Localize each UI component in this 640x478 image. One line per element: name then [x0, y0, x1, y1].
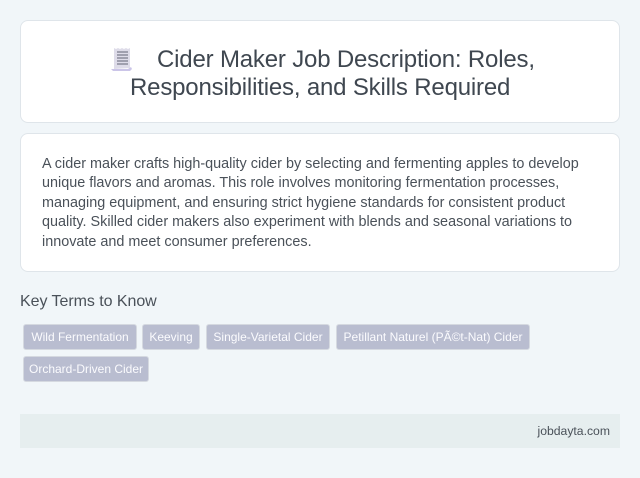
tag: wild fermentation: Wild Fermentation — [31, 330, 129, 344]
text: footer source: jobdayta.com — [538, 424, 610, 438]
tag: keeving — [142, 324, 200, 350]
tag: petillant naturel: Petillant Naturel (PÃ©t-Nat) Cider — [344, 330, 522, 344]
panel: description card — [20, 133, 620, 272]
footer bar — [20, 414, 620, 448]
heading: key terms: Key Terms to Know — [20, 293, 157, 310]
text: description line 1: A cider maker crafts high-quality cider by selecting and fermenting apples to develop — [42, 156, 579, 172]
heading: title line 1: Cider Maker Job Description: Roles, — [157, 46, 535, 73]
panel: title card — [20, 20, 620, 123]
text: description line 3: managing equipment, and ensuring strict hygiene standards for consistent product — [42, 195, 565, 211]
text: description line 2: unique flavors and aromas. This role involves monitoring fermentation processes, — [42, 175, 559, 191]
text: description line 5: innovate and meet consumer preferences. — [42, 234, 312, 250]
tag: single-varietal cider — [206, 324, 330, 350]
tag: keeving: Keeving — [149, 330, 193, 344]
tag: orchard-driven cider — [23, 356, 149, 382]
tag: orchard-driven cider: Orchard-Driven Cider — [29, 362, 143, 376]
tag: petillant naturel — [336, 324, 530, 350]
text: description line 4: quality. Skilled cider makers also experiment with blends and seasonal variations to — [42, 214, 572, 230]
heading: title line 2: Responsibilities, and Skills Required — [130, 74, 510, 101]
icon: document scroll — [111, 48, 132, 71]
tag: wild fermentation — [23, 324, 137, 350]
tag: single-varietal cider: Single-Varietal Cider — [213, 330, 323, 344]
